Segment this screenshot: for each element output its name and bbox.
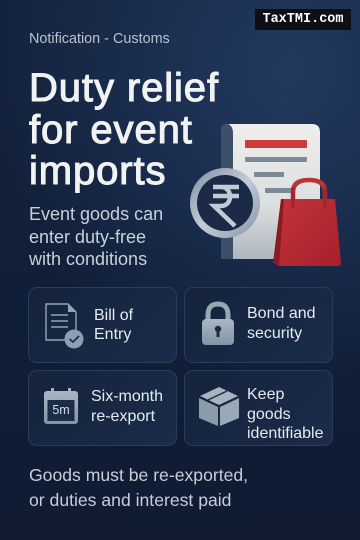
title: Duty relief <box>29 66 219 110</box>
label <box>247 386 324 442</box>
label: goods <box>247 406 291 422</box>
icon: box <box>199 387 239 426</box>
label <box>247 305 316 342</box>
label: Bond and <box>247 305 316 322</box>
label: Keep <box>247 386 284 403</box>
label: Six-month <box>91 388 163 405</box>
icon: document with check <box>45 303 84 348</box>
label: security <box>247 324 302 342</box>
label: Bill of <box>94 307 133 324</box>
document <box>221 124 320 259</box>
label <box>91 388 163 424</box>
subtitle <box>29 204 163 269</box>
panel: Bill of Entry <box>28 287 177 363</box>
watermark: TaxTMI.com <box>262 12 344 27</box>
footer note: Goods must be re-exported, <box>29 465 248 485</box>
icon: calendar 5m: 5m <box>52 403 70 417</box>
title: imports <box>29 149 166 193</box>
subtitle: enter duty-free <box>29 226 146 246</box>
panel: Keep goods identifiable <box>184 370 333 446</box>
icon: calendar 5m <box>44 388 78 424</box>
panel: Bond and security <box>184 287 333 363</box>
panel: Six-month re-export <box>28 370 177 446</box>
footer note <box>29 465 248 510</box>
label <box>94 307 134 343</box>
label: Entry <box>94 326 131 343</box>
footer note: or duties and interest paid <box>29 490 231 510</box>
label: identifiable <box>247 425 324 442</box>
title <box>29 66 219 193</box>
rupee coin <box>190 168 260 238</box>
subtitle: with conditions <box>29 249 147 269</box>
label: re-export <box>91 408 155 424</box>
watermark <box>255 9 351 30</box>
category label: Notification - Customs <box>29 31 170 47</box>
subtitle: Event goods can <box>29 204 163 224</box>
icon: padlock <box>202 302 234 345</box>
title: for event <box>29 108 193 152</box>
shopping bag <box>273 180 341 266</box>
